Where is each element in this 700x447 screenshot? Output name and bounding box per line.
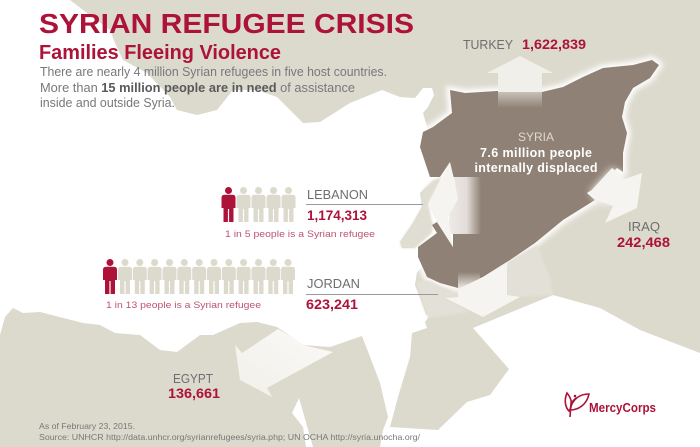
icon: Mercy Corps leaf bbox=[565, 393, 589, 417]
label: Lebanon bbox=[306, 188, 423, 223]
label: Iraq bbox=[617, 220, 671, 250]
arrow: towards Iraq bbox=[589, 168, 642, 223]
caption: Jordan ratio: 1 in 13 people is a Syrian refugee bbox=[106, 300, 261, 311]
label: Iraq: IRAQ bbox=[628, 220, 660, 234]
logo: Mercy Corps: MercyCorps bbox=[589, 401, 656, 415]
intro text: More than 15 million people are in need of assistance bbox=[40, 81, 355, 95]
label: Syria bbox=[474, 130, 598, 175]
arrow: towards Turkey bbox=[487, 56, 553, 92]
label: Egypt: EGYPT bbox=[173, 372, 213, 386]
label: Iraq: 242,468 bbox=[617, 235, 671, 250]
arrow: towards Egypt bbox=[235, 329, 333, 397]
label: Turkey: 1,622,839 bbox=[522, 37, 586, 52]
label: Turkey: TURKEY bbox=[463, 38, 514, 52]
label: Syria: internally displaced bbox=[474, 161, 598, 175]
label: Syria: SYRIA bbox=[518, 130, 554, 144]
label: Turkey bbox=[463, 37, 586, 52]
intro text: inside and outside Syria. bbox=[40, 96, 175, 110]
intro text bbox=[40, 65, 387, 110]
intro text: There are nearly 4 million Syrian refugees in five host countries. bbox=[40, 65, 387, 79]
pictogram: 1 in 5 people in Lebanon bbox=[222, 187, 296, 222]
subtitle: Families Fleeing Violence bbox=[39, 42, 281, 64]
footnote: date and sources: As of February 23, 2015. bbox=[39, 421, 135, 431]
fade: Lebanon crossing bbox=[449, 177, 481, 234]
label: Jordan bbox=[306, 277, 438, 312]
map: land east of Jordan arrow bbox=[507, 245, 553, 297]
label: Syria: 7.6 million people bbox=[480, 146, 592, 160]
label: Egypt: 136,661 bbox=[168, 386, 221, 401]
pictogram: 1 in 13 people in Jordan bbox=[103, 259, 295, 294]
map: Jordan land below Syria bbox=[416, 281, 470, 318]
fade: Turkey crossing bbox=[498, 90, 542, 108]
footnote: date and sources: Source: UNHCR http://data.unhcr.org/syrianrefugees/syria.php; UN OCHA http://syria.unocha.org/ bbox=[39, 432, 421, 442]
label: Jordan: JORDAN bbox=[307, 277, 360, 291]
label: Jordan: 623,241 bbox=[306, 297, 359, 312]
arrow: towards Jordan bbox=[445, 262, 520, 317]
map: Lebanon coastal strip bbox=[400, 177, 442, 248]
glow around Syria bbox=[418, 60, 659, 288]
fade: Jordan crossing bbox=[458, 272, 480, 290]
title: SYRIAN REFUGEE CRISIS bbox=[39, 8, 414, 39]
caption: Lebanon ratio: 1 in 5 people is a Syrian refugee bbox=[225, 229, 375, 240]
map: Egypt and Sinai bbox=[0, 308, 388, 447]
label: Lebanon: LEBANON bbox=[307, 188, 368, 202]
fade: Iraq crossing bbox=[590, 168, 626, 205]
map: Syria bbox=[418, 60, 659, 288]
logo: Mercy Corps bbox=[565, 393, 656, 417]
arrow: towards Lebanon bbox=[428, 162, 458, 247]
label: Lebanon: 1,174,313 bbox=[307, 208, 367, 223]
footnote: date and sources bbox=[39, 421, 421, 442]
label: Egypt bbox=[168, 372, 221, 401]
